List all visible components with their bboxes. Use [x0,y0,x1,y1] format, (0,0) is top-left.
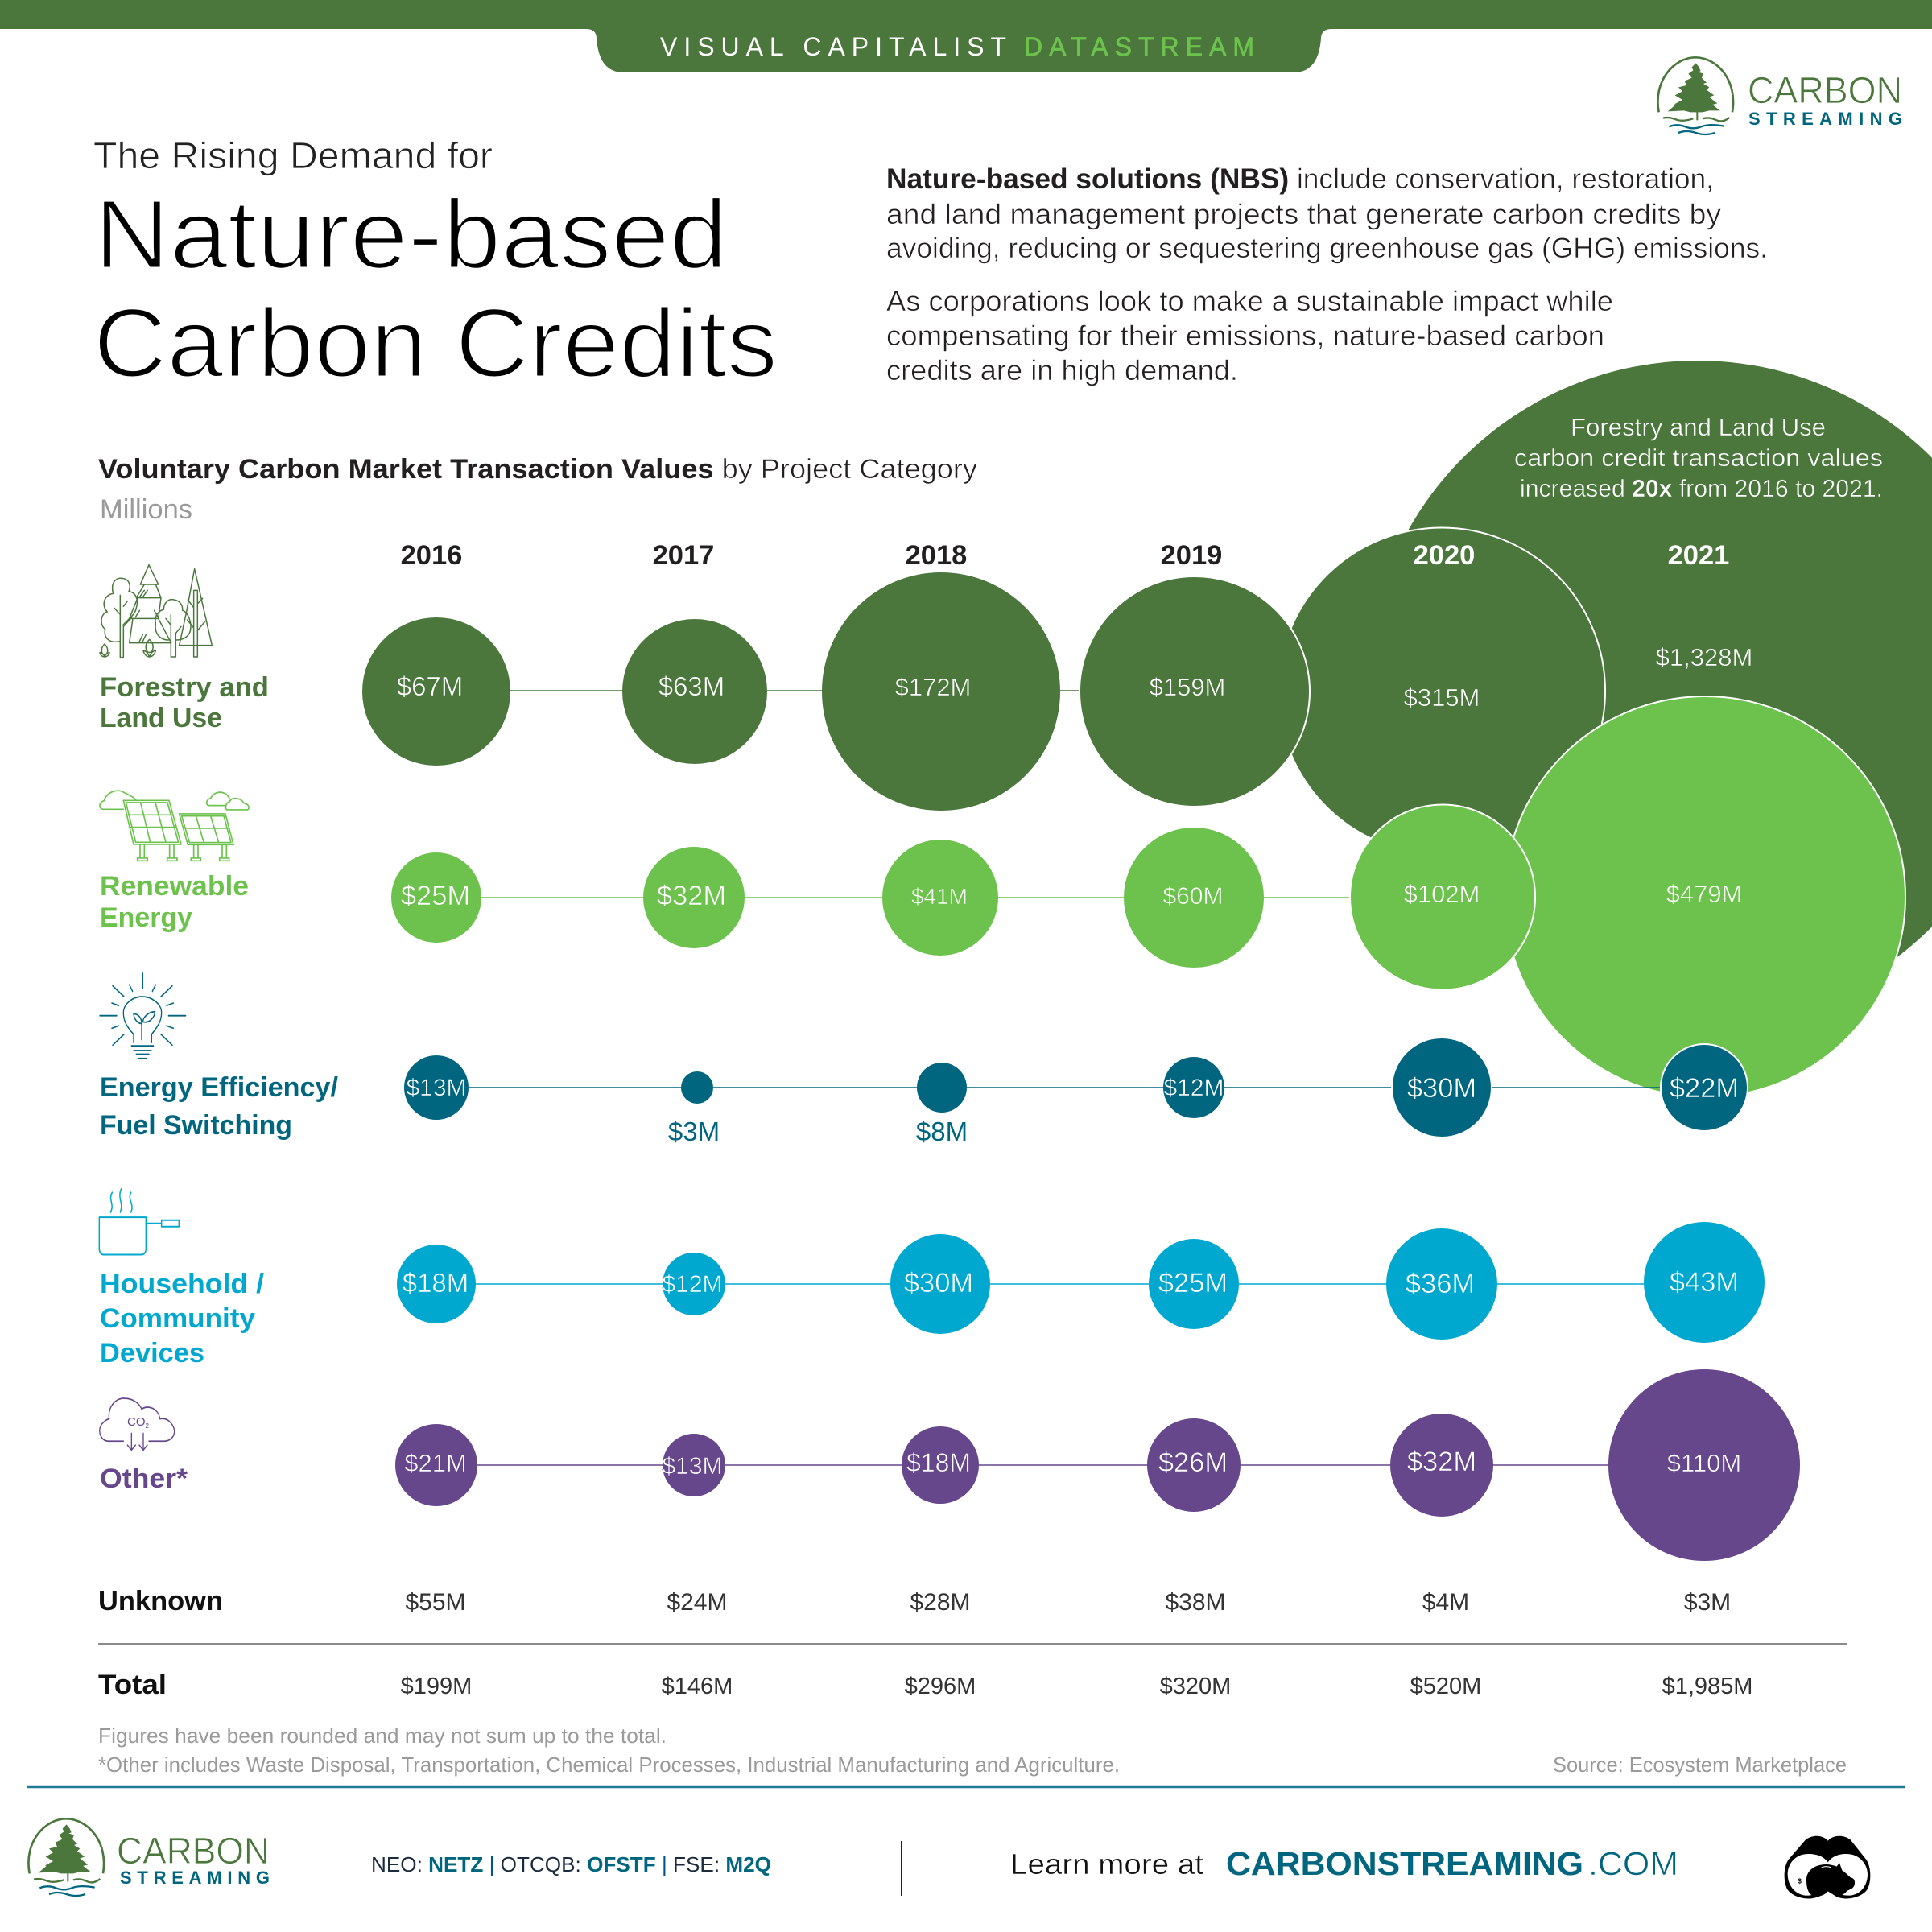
row: household community devices: $36M [1406,1269,1475,1299]
icon: solar panels [100,791,249,861]
row: other: $18M [906,1448,971,1477]
intro text: As corporations look to make a sustainable impact while [886,286,1613,317]
callout: 20x increase: Forestry and Land Use [1571,413,1826,441]
footnotes: *Other includes Waste Disposal, Transportation, Chemical Processes, Industrial Manufacturing and Agriculture. [98,1752,1120,1777]
label: Energy Efficiency/ [100,1072,339,1103]
row: energy efficiency: $22M [1670,1073,1739,1104]
row: total: $296M [905,1674,976,1699]
logo mark [1657,57,1733,134]
row: renewable energy [391,696,1905,1097]
footnotes [98,1724,1847,1777]
row: renewable energy: $41M [911,884,968,909]
row: total: $199M [401,1674,472,1699]
row: unknown: $3M [1684,1589,1731,1616]
chart heading: Voluntary Carbon Market Transaction Values by Project Category [98,454,977,485]
row: unknown: $24M [667,1589,728,1616]
chart: bubble grid [362,361,1932,1561]
title [93,134,778,398]
intro text: credits are in high demand. [886,355,1238,386]
label: Other* [100,1463,188,1494]
label [100,672,269,733]
row: household community devices [397,1222,1765,1343]
label: Devices [100,1338,204,1368]
call to action: Learn more at [1010,1847,1203,1880]
label [100,871,249,933]
year headers: 2016 [401,540,462,571]
icon: trees [100,565,212,658]
row: other: $13M [662,1453,723,1480]
intro text: compensating for their emissions, nature-based carbon [886,320,1604,352]
year headers [401,540,1729,571]
row: forestry and land use: $172M [895,673,971,701]
label: Fuel Switching [100,1110,292,1141]
row: unknown: $4M [1422,1589,1469,1616]
row: unknown: $28M [910,1589,971,1616]
row: total [98,1670,1752,1700]
year headers: 2020 [1414,540,1475,571]
logo mark [28,1818,104,1896]
row: energy efficiency: $30M [1407,1073,1476,1104]
call to action [1010,1845,1678,1882]
label: Energy [100,902,192,933]
callout: 20x increase [1514,413,1883,502]
big bubble: forestry 2021 [1366,361,1932,1024]
footnotes: Source: Ecosystem Marketplace [1553,1752,1847,1777]
row: total: Total [98,1670,167,1700]
icon: cooking pot [99,1189,179,1255]
row: forestry and land use: $315M [1404,683,1480,712]
row: other: $21M [404,1449,467,1477]
row: unknown: Unknown [98,1586,223,1616]
year headers: 2019 [1161,540,1222,571]
row: forestry and land use [362,528,1752,855]
row: other [395,1369,1800,1561]
icon text: CO2: CO [127,1415,145,1429]
label: Household / [100,1269,265,1299]
row: other: $32M [1407,1447,1476,1477]
callout: 20x increase: carbon credit transaction values [1514,444,1883,472]
intro text [886,163,1768,386]
intro text: and land management projects that generate carbon credits by [886,199,1722,230]
callout: 20x increase: increased 20x from 2016 to 2021. [1520,474,1883,502]
main heading line 2: Carbon Credits [93,288,778,398]
category: household community devices [99,1189,265,1368]
ticker symbols: NEO: NETZ | OTCQB: OFSTF | FSE: M2Q [371,1852,771,1876]
row: other: $110M [1667,1449,1741,1477]
row: energy efficiency: $13M [406,1075,467,1101]
row: total: $1,985M [1662,1674,1752,1699]
row: forestry and land use: $67M [397,671,463,701]
call to action: CARBONSTREAMING [1226,1845,1583,1882]
intro text: Nature-based solutions (NBS) include conservation, restoration, [886,163,1714,195]
logo: Carbon Streaming footer [28,1818,270,1896]
row: renewable energy: $60M [1162,883,1224,910]
chart heading: Millions [100,494,192,525]
label [100,1269,265,1368]
year headers: 2018 [906,540,967,571]
row: household community devices: $25M [1158,1268,1228,1298]
icon: light bulb with leaves [100,973,186,1059]
row: other: $26M [1158,1447,1228,1478]
header banner: VISUAL CAPITALIST [660,32,1006,61]
call to action: .COM [1588,1845,1678,1882]
year headers: 2021 [1668,540,1729,571]
label: Forestry and [100,672,269,703]
row: household community devices: $12M [662,1271,723,1298]
row: total: $520M [1410,1674,1481,1699]
label: Land Use [100,703,222,733]
row: forestry and land use: $159M [1150,673,1225,701]
logo: Carbon Streaming footer: STREAMING [120,1868,270,1888]
category: forestry and land use [100,565,269,733]
table: unknown and total [98,1586,1847,1700]
row: unknown: $38M [1165,1589,1226,1616]
icon text: CO2: 2 [145,1422,150,1430]
logo: Carbon Streaming top: STREAMING [1748,109,1902,129]
row: renewable energy: $102M [1404,880,1480,908]
row: household community devices: $18M [402,1268,469,1298]
row: total: $146M [662,1674,733,1699]
category: renewable energy [100,791,249,933]
category: other [100,1398,188,1494]
main heading line 1: Nature-based [94,180,728,289]
row: energy efficiency [404,1038,1748,1146]
footnotes: Figures have been rounded and may not sum up to the total. [98,1724,667,1748]
row: total: $320M [1160,1674,1231,1699]
logo: Carbon Streaming footer: CARBON [117,1830,270,1872]
logo: Visual Capitalist binoculars [1785,1836,1870,1898]
row: household community devices: $30M [904,1268,973,1298]
logo: Visual Capitalist binoculars: $ [1798,1877,1802,1885]
row: energy efficiency: $12M [1163,1075,1224,1101]
row: renewable energy: $25M [401,881,470,911]
row: energy efficiency: $8M [916,1117,968,1146]
row: energy efficiency: $3M [668,1117,720,1146]
chart heading [98,454,977,525]
row: household community devices: $43M [1670,1267,1739,1298]
category: energy efficiency [100,973,339,1141]
row: renewable energy: $479M [1666,880,1742,908]
row: unknown [98,1586,1731,1616]
header banner: DATASTREAM [1024,32,1254,61]
row: unknown: $55M [405,1589,466,1616]
header banner [0,0,1932,72]
label [100,1072,339,1141]
row: forestry and land use: $63M [658,671,724,701]
row: renewable energy: $32M [657,881,726,911]
icon: CO2 cloud [100,1398,175,1450]
intro text: avoiding, reducing or sequestering greenhouse gas (GHG) emissions. [886,233,1768,264]
label: Community [100,1303,255,1334]
logo: Carbon Streaming top [1657,57,1902,134]
label: Renewable [100,871,249,902]
year headers: 2017 [653,540,714,571]
subtitle: The Rising Demand for [93,134,493,176]
logo: Carbon Streaming top: CARBON [1748,69,1902,111]
row: forestry and land use: $1,328M [1656,643,1752,671]
